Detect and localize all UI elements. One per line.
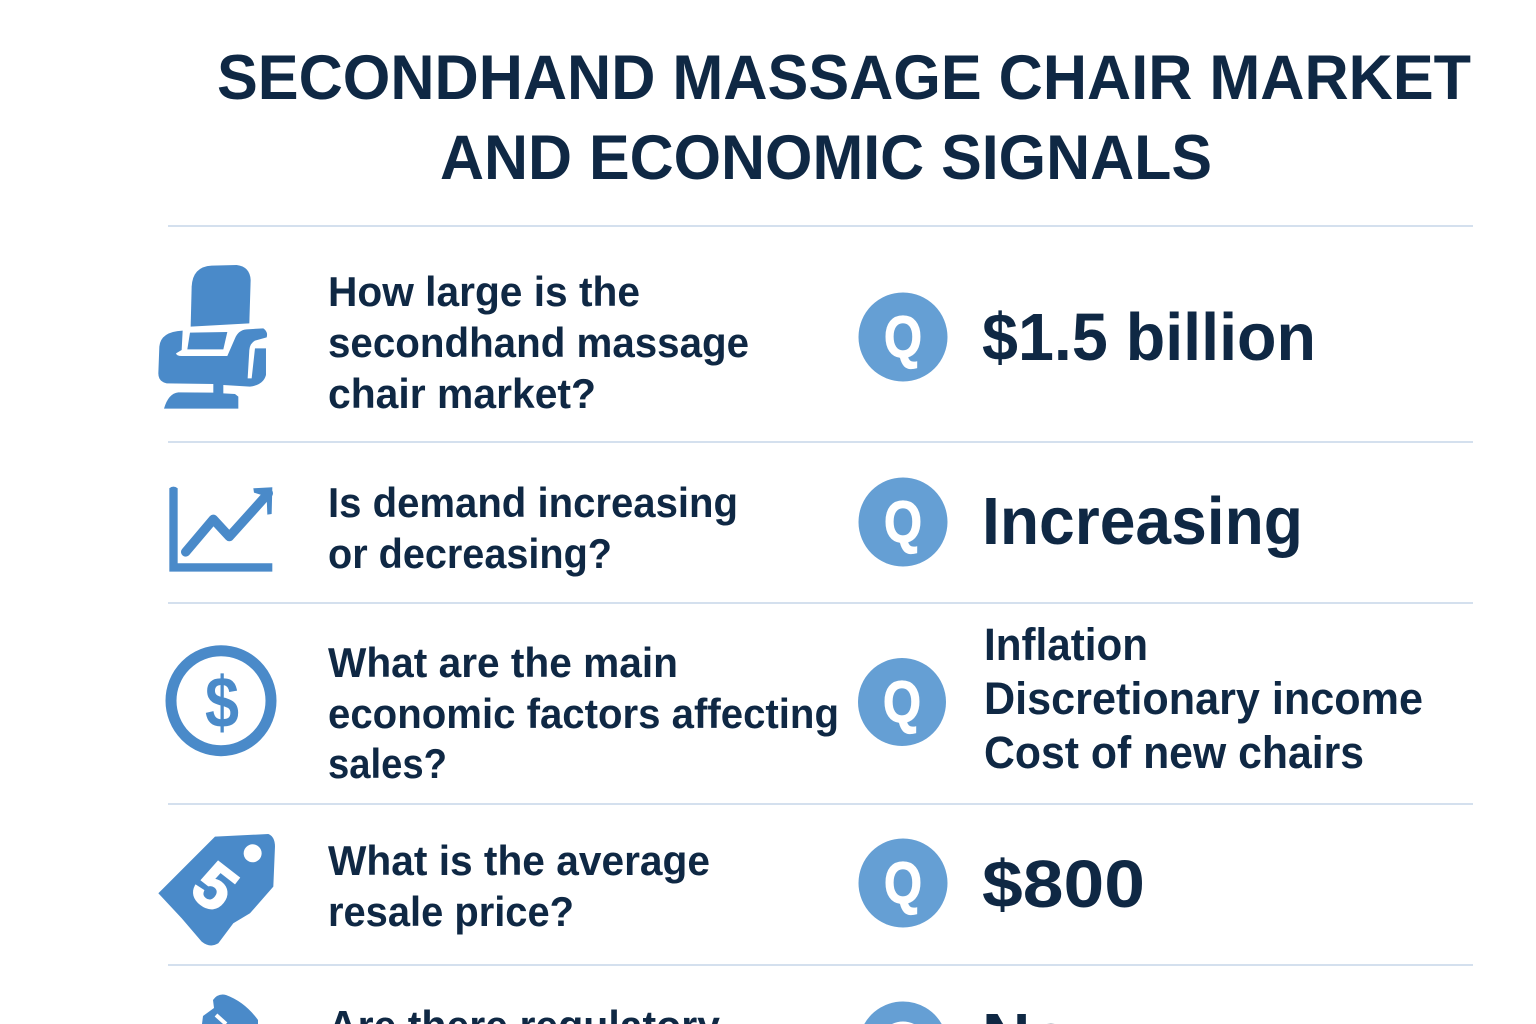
question: demand trend: or decreasing? [328, 530, 612, 577]
row: regulatory question, cropped at page bottom [202, 995, 1071, 1024]
badge: Q [858, 292, 948, 382]
icon: rising line chart [169, 487, 272, 572]
badge: Q [858, 838, 948, 928]
icon: price tag [158, 834, 275, 945]
question: economic factors: economic factors affecting [328, 690, 839, 737]
question: market size [328, 268, 749, 417]
row: market size [158, 265, 1316, 417]
answer: market size: $1.5 billion [982, 300, 1316, 375]
badge: Q [858, 658, 946, 746]
row: resale price [158, 834, 1145, 945]
badge: Q: Q [884, 851, 922, 916]
question: market size: secondhand massage [328, 319, 749, 366]
icon: massage chair [158, 265, 267, 409]
badge: Q: Q [884, 490, 922, 555]
question: resale price: resale price? [328, 888, 574, 935]
answer: economic factors list: Cost of new chairs [984, 727, 1364, 778]
icon: partly visible tag [202, 995, 258, 1024]
icon: dollar coin: $ [205, 663, 239, 743]
question: resale price: What is the average [328, 837, 710, 884]
title [217, 43, 1471, 193]
title: AND ECONOMIC SIGNALS [440, 123, 1212, 193]
question: demand trend: Is demand increasing [328, 479, 738, 526]
question: economic factors: sales? [328, 740, 447, 787]
row: demand trend [169, 478, 1303, 577]
icon: dollar coin [171, 651, 271, 751]
answer: demand trend: Increasing [982, 484, 1303, 559]
badge: Q: Q [883, 670, 921, 735]
question: resale price [328, 837, 710, 935]
answer: economic factors list: Inflation [984, 619, 1148, 670]
answer: economic factors list: Discretionary income [984, 673, 1423, 724]
icon: price tag: 5 [179, 849, 250, 926]
question: market size: chair market? [328, 370, 596, 417]
answer: resale price: $800 [982, 847, 1145, 922]
question: economic factors: What are the main [328, 639, 678, 686]
question: economic factors [328, 639, 839, 787]
title: SECONDHAND MASSAGE CHAIR MARKET [217, 43, 1471, 113]
row: economic factors [171, 619, 1423, 787]
badge: Q [858, 478, 948, 566]
question: market size: How large is the [328, 268, 640, 315]
badge: Q, cropped [864, 1001, 942, 1024]
badge: Q: Q [884, 305, 922, 370]
answer: economic factors list [984, 619, 1423, 778]
question: demand trend [328, 479, 738, 577]
